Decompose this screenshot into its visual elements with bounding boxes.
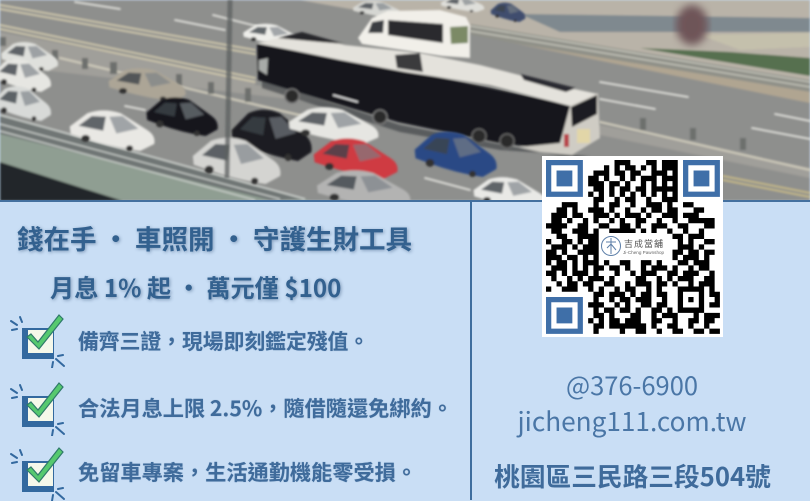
panel: left info panel [0, 200, 470, 500]
text: phone handle: @376-6900 [566, 366, 698, 403]
articulated black bus [257, 32, 600, 158]
logo: Ji-Cheng Pawnshop: Ji-Cheng Pawnshop [623, 250, 665, 255]
text: list item 1: 備齊三證，現場即刻鑑定殘值。 [78, 325, 369, 355]
heading: main slogan: 錢在手 ・ 車照開 ・ 守護生財工具 [17, 218, 412, 257]
distant cars and white van [243, 0, 525, 58]
foreground cars [0, 0, 546, 210]
logo: Ji-Cheng Pawnshop [600, 233, 667, 257]
text: list item 3: 免留車專案，生活通勤機能零受損。 [78, 456, 417, 487]
icon: checkbox 1 [10, 314, 65, 368]
text: list item 2: 合法月息上限 2.5%，隨借隨還免綁約。 [78, 392, 453, 423]
QR code with logo [542, 156, 723, 337]
icon: checkbox 3 [10, 447, 65, 501]
logo: Ji-Cheng Pawnshop: 吉成當舖 [624, 237, 664, 250]
heading: rate subtitle: 月息 1% 起 ・ 萬元僅 $100 [50, 269, 341, 304]
text: website: jicheng111.com.tw [517, 401, 747, 439]
text: address: 桃園區三民路三段504號 [494, 457, 771, 494]
photo: highway with articulated bus and cars [0, 0, 810, 200]
icon: checkbox 2 [10, 382, 65, 436]
panel: right contact panel [470, 200, 810, 500]
